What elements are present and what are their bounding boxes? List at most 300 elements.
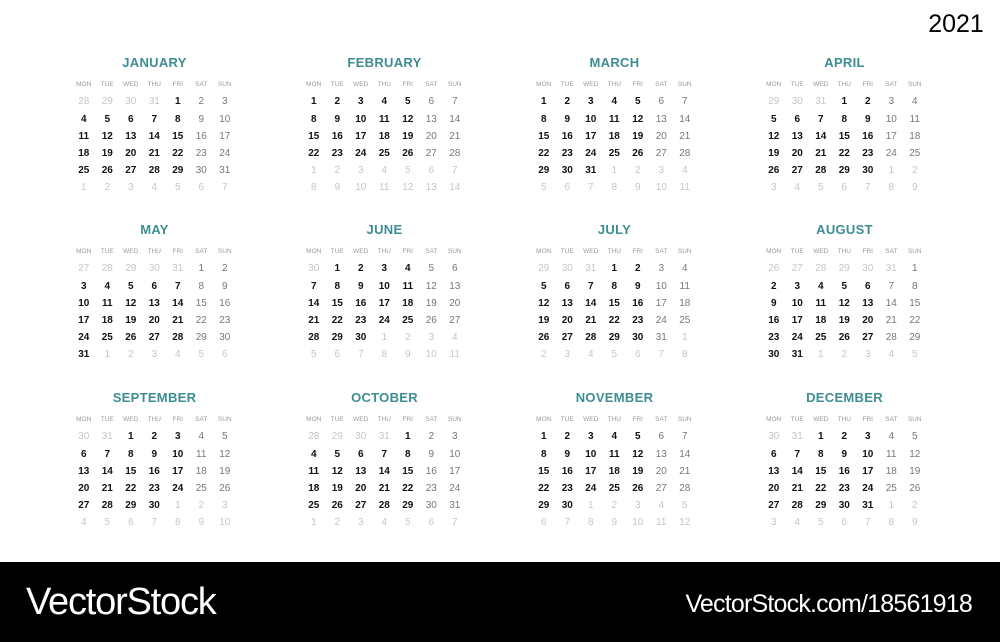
- panel: August: 17: [792, 315, 803, 326]
- panel: October: 24: [449, 483, 460, 494]
- panel: October: OCTOBER: [351, 390, 418, 405]
- panel: October: 2: [334, 517, 340, 528]
- panel: December: 28: [792, 500, 803, 511]
- panel: August: 7: [888, 281, 894, 292]
- panel: January: 24: [219, 148, 230, 159]
- panel: February: 27: [426, 148, 437, 159]
- panel: April: 26: [768, 165, 779, 176]
- panel: April: SUN: [908, 81, 922, 88]
- panel: January: 1: [81, 182, 87, 193]
- panel: June: FRI: [402, 248, 413, 255]
- panel: October: SUN: [448, 416, 462, 423]
- panel: March: 6: [564, 182, 570, 193]
- panel: June: 29: [332, 332, 343, 343]
- panel: January: 25: [78, 165, 89, 176]
- panel: January: MON: [76, 81, 91, 88]
- panel: September: 31: [102, 431, 113, 442]
- panel: March: 9: [564, 114, 570, 125]
- panel: March: 22: [538, 148, 549, 159]
- panel: November: 16: [562, 466, 573, 477]
- panel: February: 7: [452, 96, 458, 107]
- panel: June: 22: [332, 315, 343, 326]
- panel: May: 8: [198, 281, 204, 292]
- panel: May: 3: [81, 281, 87, 292]
- panel: September: 5: [222, 431, 228, 442]
- panel: August: TUE: [791, 248, 804, 255]
- panel: August: 5: [841, 281, 847, 292]
- panel: February: 21: [449, 131, 460, 142]
- panel: October: 4: [381, 517, 387, 528]
- panel: August: 20: [862, 315, 873, 326]
- panel: February: 9: [334, 182, 340, 193]
- panel: January: 30: [196, 165, 207, 176]
- panel: September: 6: [81, 449, 87, 460]
- panel: February: SAT: [425, 81, 437, 88]
- panel: May: WED: [123, 248, 138, 255]
- panel: July: 30: [632, 332, 643, 343]
- panel: March: 18: [609, 131, 620, 142]
- panel: September: 4: [198, 431, 204, 442]
- panel: September: TUE: [101, 416, 114, 423]
- panel: January: 16: [196, 131, 207, 142]
- panel: March: SUN: [678, 81, 692, 88]
- panel: November: 18: [609, 466, 620, 477]
- panel: February: 14: [449, 182, 460, 193]
- panel: April: 10: [886, 114, 897, 125]
- panel: August: 31: [886, 263, 897, 274]
- panel: July: 7: [658, 349, 664, 360]
- panel: May: 10: [78, 298, 89, 309]
- panel: February: 10: [355, 114, 366, 125]
- panel: February: [306, 55, 462, 193]
- panel: April: 7: [865, 182, 871, 193]
- panel: November: 14: [679, 449, 690, 460]
- panel: October: 9: [428, 449, 434, 460]
- panel: October: 28: [379, 500, 390, 511]
- panel: April: 30: [862, 165, 873, 176]
- panel: December: 13: [768, 466, 779, 477]
- panel: August: 14: [886, 298, 897, 309]
- panel: November: 29: [538, 500, 549, 511]
- panel: February: 26: [402, 148, 413, 159]
- panel: December: SUN: [908, 416, 922, 423]
- panel: May: 18: [102, 315, 113, 326]
- panel: February: 7: [452, 165, 458, 176]
- panel: May: 2: [222, 263, 228, 274]
- panel: September: 29: [125, 500, 136, 511]
- panel: February: 16: [332, 131, 343, 142]
- panel: November: NOVEMBER: [576, 390, 653, 405]
- panel: March: 11: [609, 114, 620, 125]
- panel: June: 4: [405, 263, 411, 274]
- panel: June: 10: [426, 349, 437, 360]
- panel: April: 14: [815, 131, 826, 142]
- panel: March: 4: [682, 165, 688, 176]
- panel: February: 2: [334, 96, 340, 107]
- panel: February: FEBRUARY: [347, 55, 422, 70]
- panel: April: 9: [865, 114, 871, 125]
- panel: July: 27: [562, 332, 573, 343]
- panel: August: 5: [912, 349, 918, 360]
- panel: April: 18: [909, 131, 920, 142]
- panel: April: 13: [792, 131, 803, 142]
- panel: June: 18: [402, 298, 413, 309]
- panel: December: 3: [865, 431, 871, 442]
- panel: November: 1: [541, 431, 547, 442]
- panel: July: [536, 222, 692, 360]
- panel: October: 3: [358, 517, 364, 528]
- panel: October: 6: [358, 449, 364, 460]
- panel: February: 4: [381, 96, 387, 107]
- panel: July: 16: [632, 298, 643, 309]
- panel: December: 8: [818, 449, 824, 460]
- panel: September: 1: [175, 500, 181, 511]
- panel: January: 6: [128, 114, 134, 125]
- panel: August: 29: [839, 263, 850, 274]
- panel: February: FRI: [402, 81, 413, 88]
- panel: October: 12: [332, 466, 343, 477]
- panel: September: 20: [78, 483, 89, 494]
- panel: November: 10: [632, 517, 643, 528]
- footer bar: [0, 562, 1000, 642]
- panel: December: 2: [841, 431, 847, 442]
- panel: February: 1: [311, 165, 317, 176]
- panel: November: 21: [679, 466, 690, 477]
- panel: August: 30: [862, 263, 873, 274]
- panel: June: THU: [378, 248, 391, 255]
- panel: December: TUE: [791, 416, 804, 423]
- panel: February: 20: [426, 131, 437, 142]
- panel: March: TUE: [561, 81, 574, 88]
- panel: February: 17: [355, 131, 366, 142]
- panel: December: 7: [865, 517, 871, 528]
- panel: December: 20: [768, 483, 779, 494]
- panel: March: 10: [585, 114, 596, 125]
- footer url: VectorStock.com/18561918: [685, 590, 972, 618]
- panel: March: 2: [635, 165, 641, 176]
- panel: January: 3: [128, 182, 134, 193]
- panel: April: 28: [815, 165, 826, 176]
- panel: February: 10: [355, 182, 366, 193]
- panel: January: 31: [149, 96, 160, 107]
- panel: June: 27: [449, 315, 460, 326]
- panel: September: SUN: [218, 416, 232, 423]
- panel: September: 25: [196, 483, 207, 494]
- panel: March: 20: [656, 131, 667, 142]
- panel: July: 2: [541, 349, 547, 360]
- panel: June: 2: [405, 332, 411, 343]
- panel: November: [536, 390, 692, 528]
- panel: December: 6: [841, 517, 847, 528]
- panel: October: FRI: [402, 416, 413, 423]
- panel: January: 20: [125, 148, 136, 159]
- panel: July: 24: [656, 315, 667, 326]
- panel: June: 20: [449, 298, 460, 309]
- panel: September: 10: [219, 517, 230, 528]
- panel: November: 28: [679, 483, 690, 494]
- panel: October: THU: [378, 416, 391, 423]
- panel: May: 4: [175, 349, 181, 360]
- panel: July: 1: [682, 332, 688, 343]
- panel: May: MON: [76, 248, 91, 255]
- panel: December: 8: [888, 517, 894, 528]
- panel: November: 15: [538, 466, 549, 477]
- panel: December: 22: [815, 483, 826, 494]
- panel: September: 30: [78, 431, 89, 442]
- panel: August: 23: [768, 332, 779, 343]
- panel: September: 7: [151, 517, 157, 528]
- panel: December: 9: [912, 517, 918, 528]
- panel: February: 6: [428, 96, 434, 107]
- panel: August: 11: [815, 298, 826, 309]
- panel: July: 23: [632, 315, 643, 326]
- panel: December: 26: [909, 483, 920, 494]
- panel: August: 31: [792, 349, 803, 360]
- panel: November: 7: [682, 431, 688, 442]
- panel: April: 3: [771, 182, 777, 193]
- panel: April: 21: [815, 148, 826, 159]
- panel: May: 3: [151, 349, 157, 360]
- panel: May: 6: [222, 349, 228, 360]
- panel: February: 28: [449, 148, 460, 159]
- panel: January: 30: [125, 96, 136, 107]
- panel: October: 3: [452, 431, 458, 442]
- panel: May: 26: [125, 332, 136, 343]
- panel: September: 26: [219, 483, 230, 494]
- panel: February: 11: [379, 182, 389, 193]
- panel: January: 28: [149, 165, 160, 176]
- panel: April: 4: [912, 96, 918, 107]
- panel: March: 9: [635, 182, 641, 193]
- panel: May: TUE: [101, 248, 114, 255]
- panel: March: 24: [585, 148, 596, 159]
- panel: March: 17: [585, 131, 596, 142]
- panel: March: SAT: [655, 81, 667, 88]
- panel: December: 10: [862, 449, 873, 460]
- panel: July: 4: [682, 263, 688, 274]
- panel: December: 4: [794, 517, 800, 528]
- panel: June: 2: [358, 263, 364, 274]
- panel: January: SAT: [195, 81, 207, 88]
- panel: July: 12: [538, 298, 549, 309]
- panel: June: 23: [355, 315, 366, 326]
- panel: April: [766, 55, 922, 193]
- panel: May: 2: [128, 349, 134, 360]
- panel: May: 1: [198, 263, 204, 274]
- panel: January: 28: [78, 96, 89, 107]
- panel: April: THU: [838, 81, 851, 88]
- panel: August: 15: [909, 298, 920, 309]
- panel: September: 9: [151, 449, 157, 460]
- panel: November: 9: [611, 517, 617, 528]
- panel: August: 26: [768, 263, 779, 274]
- panel: April: 27: [792, 165, 803, 176]
- panel: May: 4: [104, 281, 110, 292]
- panel: November: 4: [611, 431, 617, 442]
- panel: January: 4: [81, 114, 87, 125]
- panel: January: 23: [196, 148, 207, 159]
- panel: December: 15: [815, 466, 826, 477]
- panel: September: 11: [196, 449, 206, 460]
- panel: December: 31: [792, 431, 803, 442]
- panel: May: 21: [172, 315, 183, 326]
- panel: January: JANUARY: [122, 55, 187, 70]
- panel: October: SAT: [425, 416, 437, 423]
- panel: June: SAT: [425, 248, 437, 255]
- panel: June: MON: [306, 248, 321, 255]
- panel: August: 1: [912, 263, 918, 274]
- panel: December: 21: [792, 483, 803, 494]
- panel: February: MON: [306, 81, 321, 88]
- panel: July: 29: [609, 332, 620, 343]
- panel: December: 5: [818, 517, 824, 528]
- panel: November: SUN: [678, 416, 692, 423]
- panel: April: MON: [766, 81, 781, 88]
- panel: March: WED: [583, 81, 598, 88]
- panel: April: SAT: [885, 81, 897, 88]
- panel: May: 27: [78, 263, 89, 274]
- panel: April: 1: [841, 96, 847, 107]
- panel: December: THU: [838, 416, 851, 423]
- panel: March: 1: [541, 96, 547, 107]
- panel: December: 24: [862, 483, 873, 494]
- panel: December: 5: [912, 431, 918, 442]
- panel: September: 1: [128, 431, 134, 442]
- panel: July: JULY: [598, 222, 631, 237]
- panel: January: [76, 55, 232, 193]
- panel: September: 27: [78, 500, 89, 511]
- panel: June: 9: [358, 281, 364, 292]
- panel: February: TUE: [331, 81, 344, 88]
- panel: March: 8: [541, 114, 547, 125]
- panel: September: 9: [198, 517, 204, 528]
- panel: January: 31: [219, 165, 230, 176]
- panel: August: 4: [818, 281, 824, 292]
- panel: October: 10: [449, 449, 460, 460]
- panel: November: 17: [585, 466, 596, 477]
- panel: October: 31: [449, 500, 460, 511]
- panel: June: 7: [358, 349, 364, 360]
- panel: May: 31: [78, 349, 89, 360]
- panel: January: 2: [198, 96, 204, 107]
- panel: June: 1: [334, 263, 340, 274]
- panel: September: 3: [175, 431, 181, 442]
- panel: January: FRI: [172, 81, 183, 88]
- panel: November: 2: [611, 500, 617, 511]
- panel: October: 16: [426, 466, 437, 477]
- panel: July: 9: [635, 281, 641, 292]
- panel: January: 9: [198, 114, 204, 125]
- panel: January: 14: [149, 131, 160, 142]
- panel: December: 6: [771, 449, 777, 460]
- panel: January: 27: [125, 165, 136, 176]
- panel: May: 24: [78, 332, 89, 343]
- panel: November: 3: [635, 500, 641, 511]
- panel: November: 4: [658, 500, 664, 511]
- panel: January: 19: [102, 148, 113, 159]
- panel: June: 1: [381, 332, 387, 343]
- panel: July: 4: [588, 349, 594, 360]
- panel: February: WED: [353, 81, 368, 88]
- panel: May: 12: [125, 298, 136, 309]
- panel: February: 8: [311, 182, 317, 193]
- panel: March: 8: [611, 182, 617, 193]
- panel: November: 7: [564, 517, 570, 528]
- panel: March: 7: [682, 96, 688, 107]
- panel: July: 31: [656, 332, 667, 343]
- panel: March: 7: [588, 182, 594, 193]
- panel: October: 14: [379, 466, 390, 477]
- panel: June: 3: [381, 263, 387, 274]
- panel: March: 27: [656, 148, 667, 159]
- panel: May: 31: [172, 263, 183, 274]
- panel: September: MON: [76, 416, 91, 423]
- panel: March: 13: [656, 114, 667, 125]
- panel: June: 15: [332, 298, 343, 309]
- panel: April: 2: [865, 96, 871, 107]
- panel: January: 21: [149, 148, 160, 159]
- panel: June: 16: [355, 298, 366, 309]
- panel: August: 6: [865, 281, 871, 292]
- panel: August: 26: [839, 332, 850, 343]
- panel: February: 12: [402, 114, 413, 125]
- panel: September: 3: [222, 500, 228, 511]
- panel: August: THU: [838, 248, 851, 255]
- panel: April: 31: [815, 96, 826, 107]
- panel: October: 22: [402, 483, 413, 494]
- panel: August: 22: [909, 315, 920, 326]
- panel: November: 8: [588, 517, 594, 528]
- panel: November: 6: [658, 431, 664, 442]
- panel: August: 19: [839, 315, 850, 326]
- panel: December: 16: [839, 466, 850, 477]
- panel: June: 19: [426, 298, 437, 309]
- panel: February: 22: [308, 148, 319, 159]
- panel: November: 5: [635, 431, 641, 442]
- panel: June: 5: [311, 349, 317, 360]
- panel: February: 11: [379, 114, 390, 125]
- panel: April: APRIL: [824, 55, 865, 70]
- panel: August: 24: [792, 332, 803, 343]
- panel: March: 10: [656, 182, 667, 193]
- panel: February: 9: [334, 114, 340, 125]
- panel: April: 3: [888, 96, 894, 107]
- panel: July: 15: [609, 298, 620, 309]
- panel: September: 12: [219, 449, 230, 460]
- panel: November: 24: [585, 483, 596, 494]
- panel: April: 8: [841, 114, 847, 125]
- panel: April: 19: [768, 148, 779, 159]
- panel: August: 28: [886, 332, 897, 343]
- panel: January: 4: [151, 182, 157, 193]
- panel: February: 6: [428, 165, 434, 176]
- panel: March: 14: [679, 114, 690, 125]
- panel: April: FRI: [862, 81, 873, 88]
- panel: October: 25: [308, 500, 319, 511]
- panel: July: 5: [611, 349, 617, 360]
- panel: September: 14: [102, 466, 113, 477]
- panel: January: 12: [102, 131, 113, 142]
- panel: March: 21: [679, 131, 690, 142]
- panel: December: 17: [862, 466, 873, 477]
- panel: February: 3: [358, 96, 364, 107]
- panel: June: 3: [428, 332, 434, 343]
- panel: June: 14: [308, 298, 319, 309]
- footer brand: VectorStock: [26, 581, 216, 623]
- panel: December: MON: [766, 416, 781, 423]
- panel: February: 3: [358, 165, 364, 176]
- panel: September: 13: [78, 466, 89, 477]
